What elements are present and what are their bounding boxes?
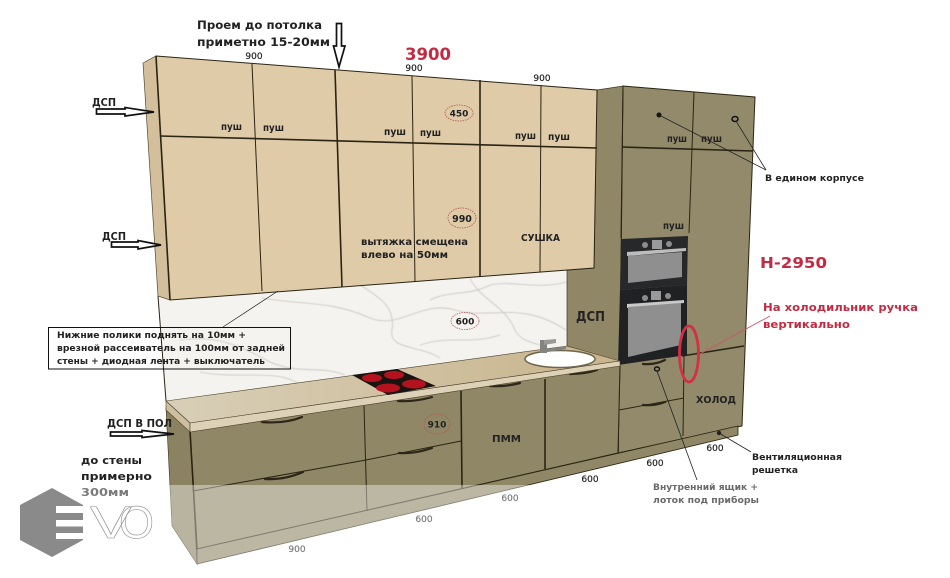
note: distance to wall: до стены <box>81 454 142 467</box>
label: dishwasher: ПММ <box>492 434 521 445</box>
leader dots: single carcass <box>656 112 766 170</box>
sink <box>525 339 595 368</box>
note: inner drawer: Внутренний ящик + <box>653 483 758 493</box>
arrow: ДСП upper <box>96 108 154 116</box>
dimensions: upper modules: 900 <box>405 64 423 74</box>
dimensions: upper modules <box>245 52 551 84</box>
upper cabinets front <box>156 56 597 300</box>
title note: opening to ceiling <box>197 18 330 49</box>
height marker 910: 910 <box>428 420 446 430</box>
dimensions: upper modules: 900 <box>533 74 551 84</box>
watermark band <box>0 485 950 578</box>
built-in microwave <box>620 236 688 290</box>
red ellipse: fridge handle <box>680 326 698 382</box>
total height: Н-2950 <box>760 254 827 272</box>
push labels: пуш <box>263 123 284 134</box>
handles: oven drawer units <box>643 360 665 405</box>
height marker 450: 450 <box>450 110 468 120</box>
note: distance to wall: 300мм <box>81 486 129 499</box>
label: ДСП to floor: ДСП В ПОЛ <box>107 418 172 430</box>
leader: lower shelves note <box>223 291 278 327</box>
title note: opening to ceiling: Проем до потолка <box>197 18 322 32</box>
leader: fridge handle <box>700 316 770 354</box>
note: distance to wall: примерно <box>81 470 152 483</box>
dimensions: base modules: 600 <box>501 494 519 504</box>
logo: EVO <box>20 488 154 557</box>
height marker 910 <box>424 414 450 434</box>
push labels: пуш <box>384 127 406 138</box>
plinth <box>197 426 738 564</box>
note: hood offset <box>361 237 468 261</box>
upper cabinets <box>143 56 597 300</box>
base door lines <box>190 379 545 549</box>
logo: EVO: O <box>119 497 154 548</box>
upper cabinet door lines <box>156 56 597 300</box>
arrow: ДСП to floor <box>110 430 174 438</box>
note: vent grille: Вентиляционная <box>752 453 842 463</box>
push labels: пуш <box>663 221 684 232</box>
leader: vent grille <box>717 431 751 452</box>
leader: inner drawer <box>654 367 697 480</box>
dimensions: base modules: 900 <box>288 545 306 555</box>
dimensions: base modules: 600 <box>706 444 724 454</box>
note: vent grille <box>752 453 842 476</box>
callout: lower shelves: Нижние полики поднять на 10мм + <box>57 331 246 341</box>
base cabinet fronts <box>190 365 620 549</box>
dimensions: base modules <box>288 444 724 555</box>
upper cabinets side panel <box>143 56 170 300</box>
base cabinet handles <box>262 370 597 479</box>
height marker 600: 600 <box>456 318 474 328</box>
tall column front <box>618 86 755 453</box>
note: fridge handle: вертикально <box>763 318 850 331</box>
label: ДСП middle: ДСП <box>102 231 126 243</box>
push labels: пуш <box>221 122 242 133</box>
hob <box>352 369 436 395</box>
label: ДСП column: ДСП <box>576 310 605 325</box>
label: drying rack: СУШКА <box>521 233 561 244</box>
note: hood offset: вытяжка смещена <box>361 237 468 248</box>
dimensions: base modules: 600 <box>415 515 433 525</box>
base cabinets <box>166 365 738 564</box>
height marker 600 <box>451 312 479 330</box>
backsplash: marble <box>158 270 567 401</box>
built-in oven <box>618 285 687 365</box>
push labels <box>221 122 722 232</box>
label: ДСП upper: ДСП <box>92 97 116 109</box>
height marker 990: 990 <box>452 214 472 225</box>
arrow: ДСП middle <box>112 240 161 249</box>
height marker 450 <box>445 105 473 121</box>
label: fridge: ХОЛОД <box>696 395 736 406</box>
callout: lower shelves: врезной рассеиватель на 100мм от задней <box>57 344 285 354</box>
total width 3900: 3900 <box>405 45 451 65</box>
push labels: пуш <box>667 134 687 145</box>
note: fridge handle <box>763 301 918 331</box>
note: vent grille: решетка <box>752 466 798 476</box>
push labels: пуш <box>701 134 722 145</box>
note: hood offset: влево на 50мм <box>361 250 448 261</box>
push labels: пуш <box>420 128 441 139</box>
push labels: пуш <box>515 131 536 142</box>
callout: lower shelves: стены + диодная лента + выключатель <box>57 357 265 367</box>
note: inner drawer: лоток под приборы <box>653 495 759 506</box>
note: fridge handle: На холодильник ручка <box>763 301 918 314</box>
height marker 990 <box>448 208 476 228</box>
push labels: пуш <box>548 132 570 143</box>
arrow: down to ceiling line <box>334 24 345 67</box>
base cabinet side panel <box>166 408 197 564</box>
note: single carcass: В едином корпусе <box>765 174 864 184</box>
dimensions: base modules: 600 <box>646 459 664 469</box>
callout: lower shelves <box>48 328 290 369</box>
countertop <box>166 346 620 432</box>
note: inner drawer <box>653 483 759 506</box>
tall column side panel <box>567 86 623 362</box>
title note: opening to ceiling: приметно 15-20мм <box>197 35 330 49</box>
dimensions: base modules: 600 <box>581 475 599 485</box>
dimensions: upper modules: 900 <box>245 52 263 62</box>
note: distance to wall <box>81 454 152 499</box>
logo: EVO: V <box>90 498 132 548</box>
